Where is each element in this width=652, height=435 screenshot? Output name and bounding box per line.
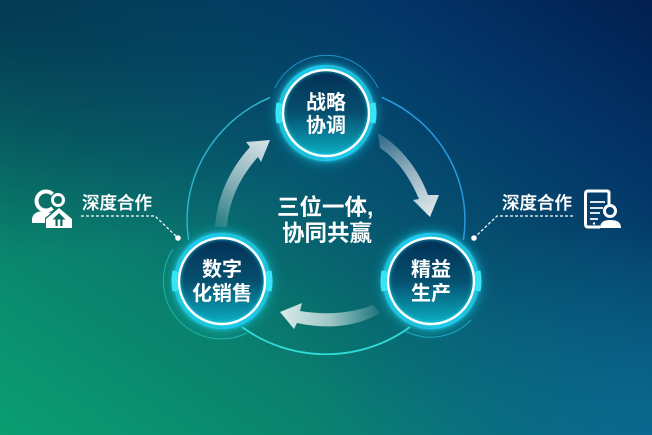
center title: 协同共赢 [282, 220, 372, 246]
left callout: 深度合作 [82, 193, 152, 213]
arrow: production to sales [280, 303, 380, 329]
node: 数字化销售 [163, 231, 272, 339]
center title [277, 194, 373, 246]
arrow: strategy to production [378, 133, 439, 217]
right callout [471, 193, 573, 241]
node: 精益生产: 生产 [411, 282, 451, 305]
node: 战略协调 [275, 55, 378, 163]
node: 数字化销售: 化销售 [192, 282, 252, 305]
node: 精益生产 [381, 231, 481, 337]
icon: phone document with person [586, 191, 621, 228]
large orbit ring [187, 98, 465, 354]
arrow: sales to strategy [215, 140, 270, 227]
right callout: 深度合作 [502, 193, 572, 213]
icon: person with house [32, 192, 72, 228]
node: 战略协调: 战略 [306, 90, 346, 114]
left callout [81, 193, 181, 241]
center title: 三位一体, [277, 194, 373, 220]
node: 精益生产: 精益 [411, 258, 451, 281]
node: 数字化销售: 数字 [202, 257, 242, 281]
node: 战略协调: 协调 [306, 114, 346, 137]
